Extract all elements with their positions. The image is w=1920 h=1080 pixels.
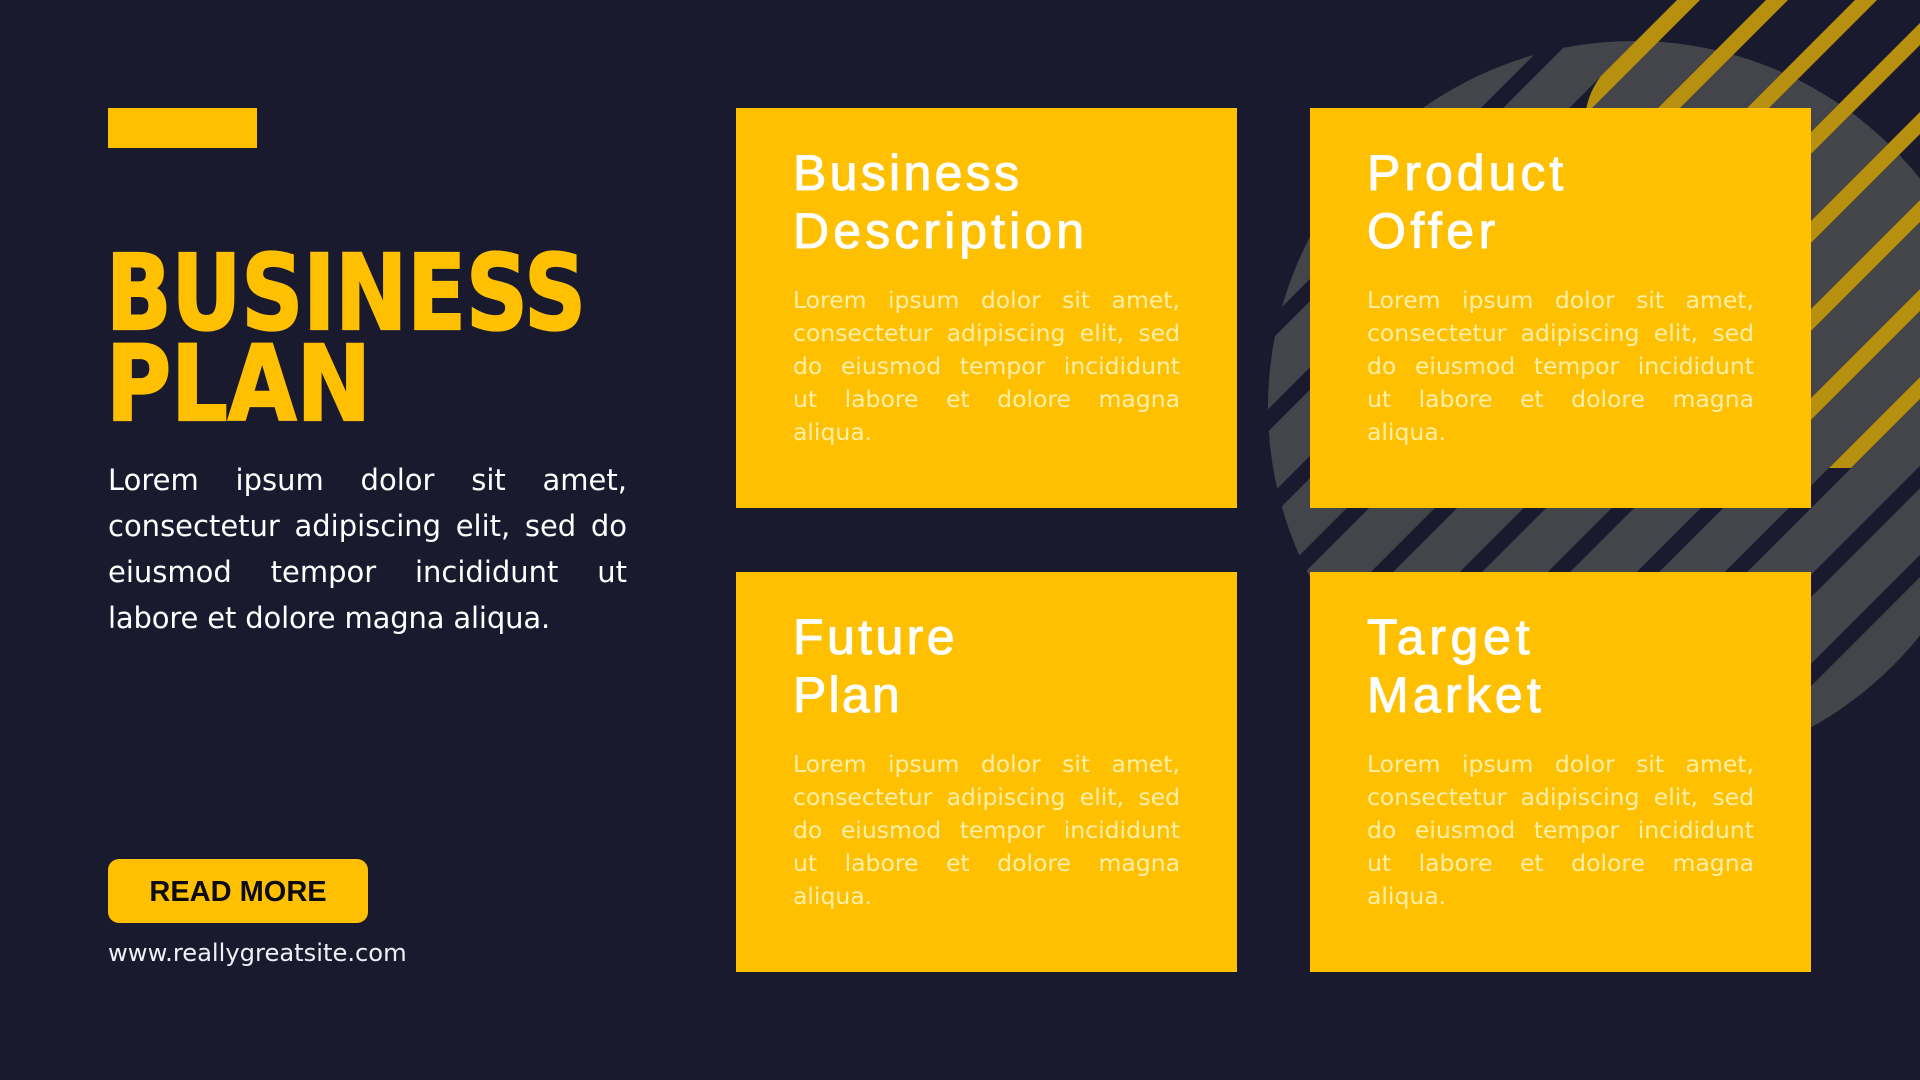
text: business description body xyxy=(793,286,1180,446)
text: product offer body: ut labore et dolore magna xyxy=(1367,385,1754,413)
text: business description body: do eiusmod tempor incididunt xyxy=(793,352,1180,380)
heading: target market xyxy=(1367,609,1545,723)
heading: product offer: Product xyxy=(1367,145,1567,201)
text: business description body: ut labore et dolore magna xyxy=(793,385,1180,413)
intro paragraph: consectetur adipiscing elit, sed do xyxy=(108,508,627,542)
text: business description body: consectetur adipiscing elit, sed xyxy=(793,319,1180,347)
heading: future plan xyxy=(793,609,958,723)
text: future plan body: aliqua. xyxy=(793,882,872,910)
accent bar xyxy=(108,108,257,148)
intro paragraph: eiusmod tempor incididunt ut xyxy=(108,554,627,588)
text: target market body: do eiusmod tempor incididunt xyxy=(1367,816,1754,844)
grey circle xyxy=(1268,41,1920,773)
text: target market body: ut labore et dolore magna xyxy=(1367,849,1754,877)
text: target market body: aliqua. xyxy=(1367,882,1446,910)
text: target market body: consectetur adipiscing elit, sed xyxy=(1367,783,1754,811)
panel: target market xyxy=(1310,572,1811,972)
text: product offer body: Lorem ipsum dolor sit amet, xyxy=(1367,286,1754,314)
gold diagonal stripes xyxy=(1586,0,1920,468)
button: read more: READ MORE xyxy=(149,876,327,908)
intro paragraph: Lorem ipsum dolor sit amet, xyxy=(108,462,627,496)
text: product offer body: aliqua. xyxy=(1367,418,1446,446)
heading: product offer: Offer xyxy=(1367,203,1500,259)
heading: target market: Market xyxy=(1367,667,1545,723)
panel: future plan xyxy=(736,572,1237,972)
dark diagonal stripes xyxy=(520,0,1920,1080)
panel: business description xyxy=(736,108,1237,508)
heading: target market: Target xyxy=(1367,609,1534,665)
text: product offer body xyxy=(1367,286,1754,446)
heading: business description: Business xyxy=(793,145,1022,201)
text: future plan body xyxy=(793,750,1180,910)
heading: business description: Description xyxy=(793,203,1088,259)
heading: future plan: Plan xyxy=(793,667,902,723)
intro paragraph: labore et dolore magna aliqua. xyxy=(108,600,550,634)
background decoration: striped circle xyxy=(1268,0,1920,728)
panel: product offer xyxy=(1310,108,1811,508)
heading: product offer xyxy=(1367,145,1567,259)
heading: business description xyxy=(793,145,1088,259)
text: future plan body: Lorem ipsum dolor sit amet, xyxy=(793,750,1180,778)
intro paragraph xyxy=(108,462,627,634)
text: business description body: aliqua. xyxy=(793,418,872,446)
text: target market body: Lorem ipsum dolor sit amet, xyxy=(1367,750,1754,778)
text: product offer body: consectetur adipiscing elit, sed xyxy=(1367,319,1754,347)
title xyxy=(106,240,586,430)
heading: future plan: Future xyxy=(793,609,958,665)
website url: www.reallygreatsite.com xyxy=(108,939,407,967)
text: future plan body: consectetur adipiscing elit, sed xyxy=(793,783,1180,811)
text: target market body xyxy=(1367,750,1754,910)
text: future plan body: do eiusmod tempor incididunt xyxy=(793,816,1180,844)
button: read more xyxy=(108,859,368,923)
text: business description body: Lorem ipsum dolor sit amet, xyxy=(793,286,1180,314)
text: product offer body: do eiusmod tempor incididunt xyxy=(1367,352,1754,380)
text: future plan body: ut labore et dolore magna xyxy=(793,849,1180,877)
